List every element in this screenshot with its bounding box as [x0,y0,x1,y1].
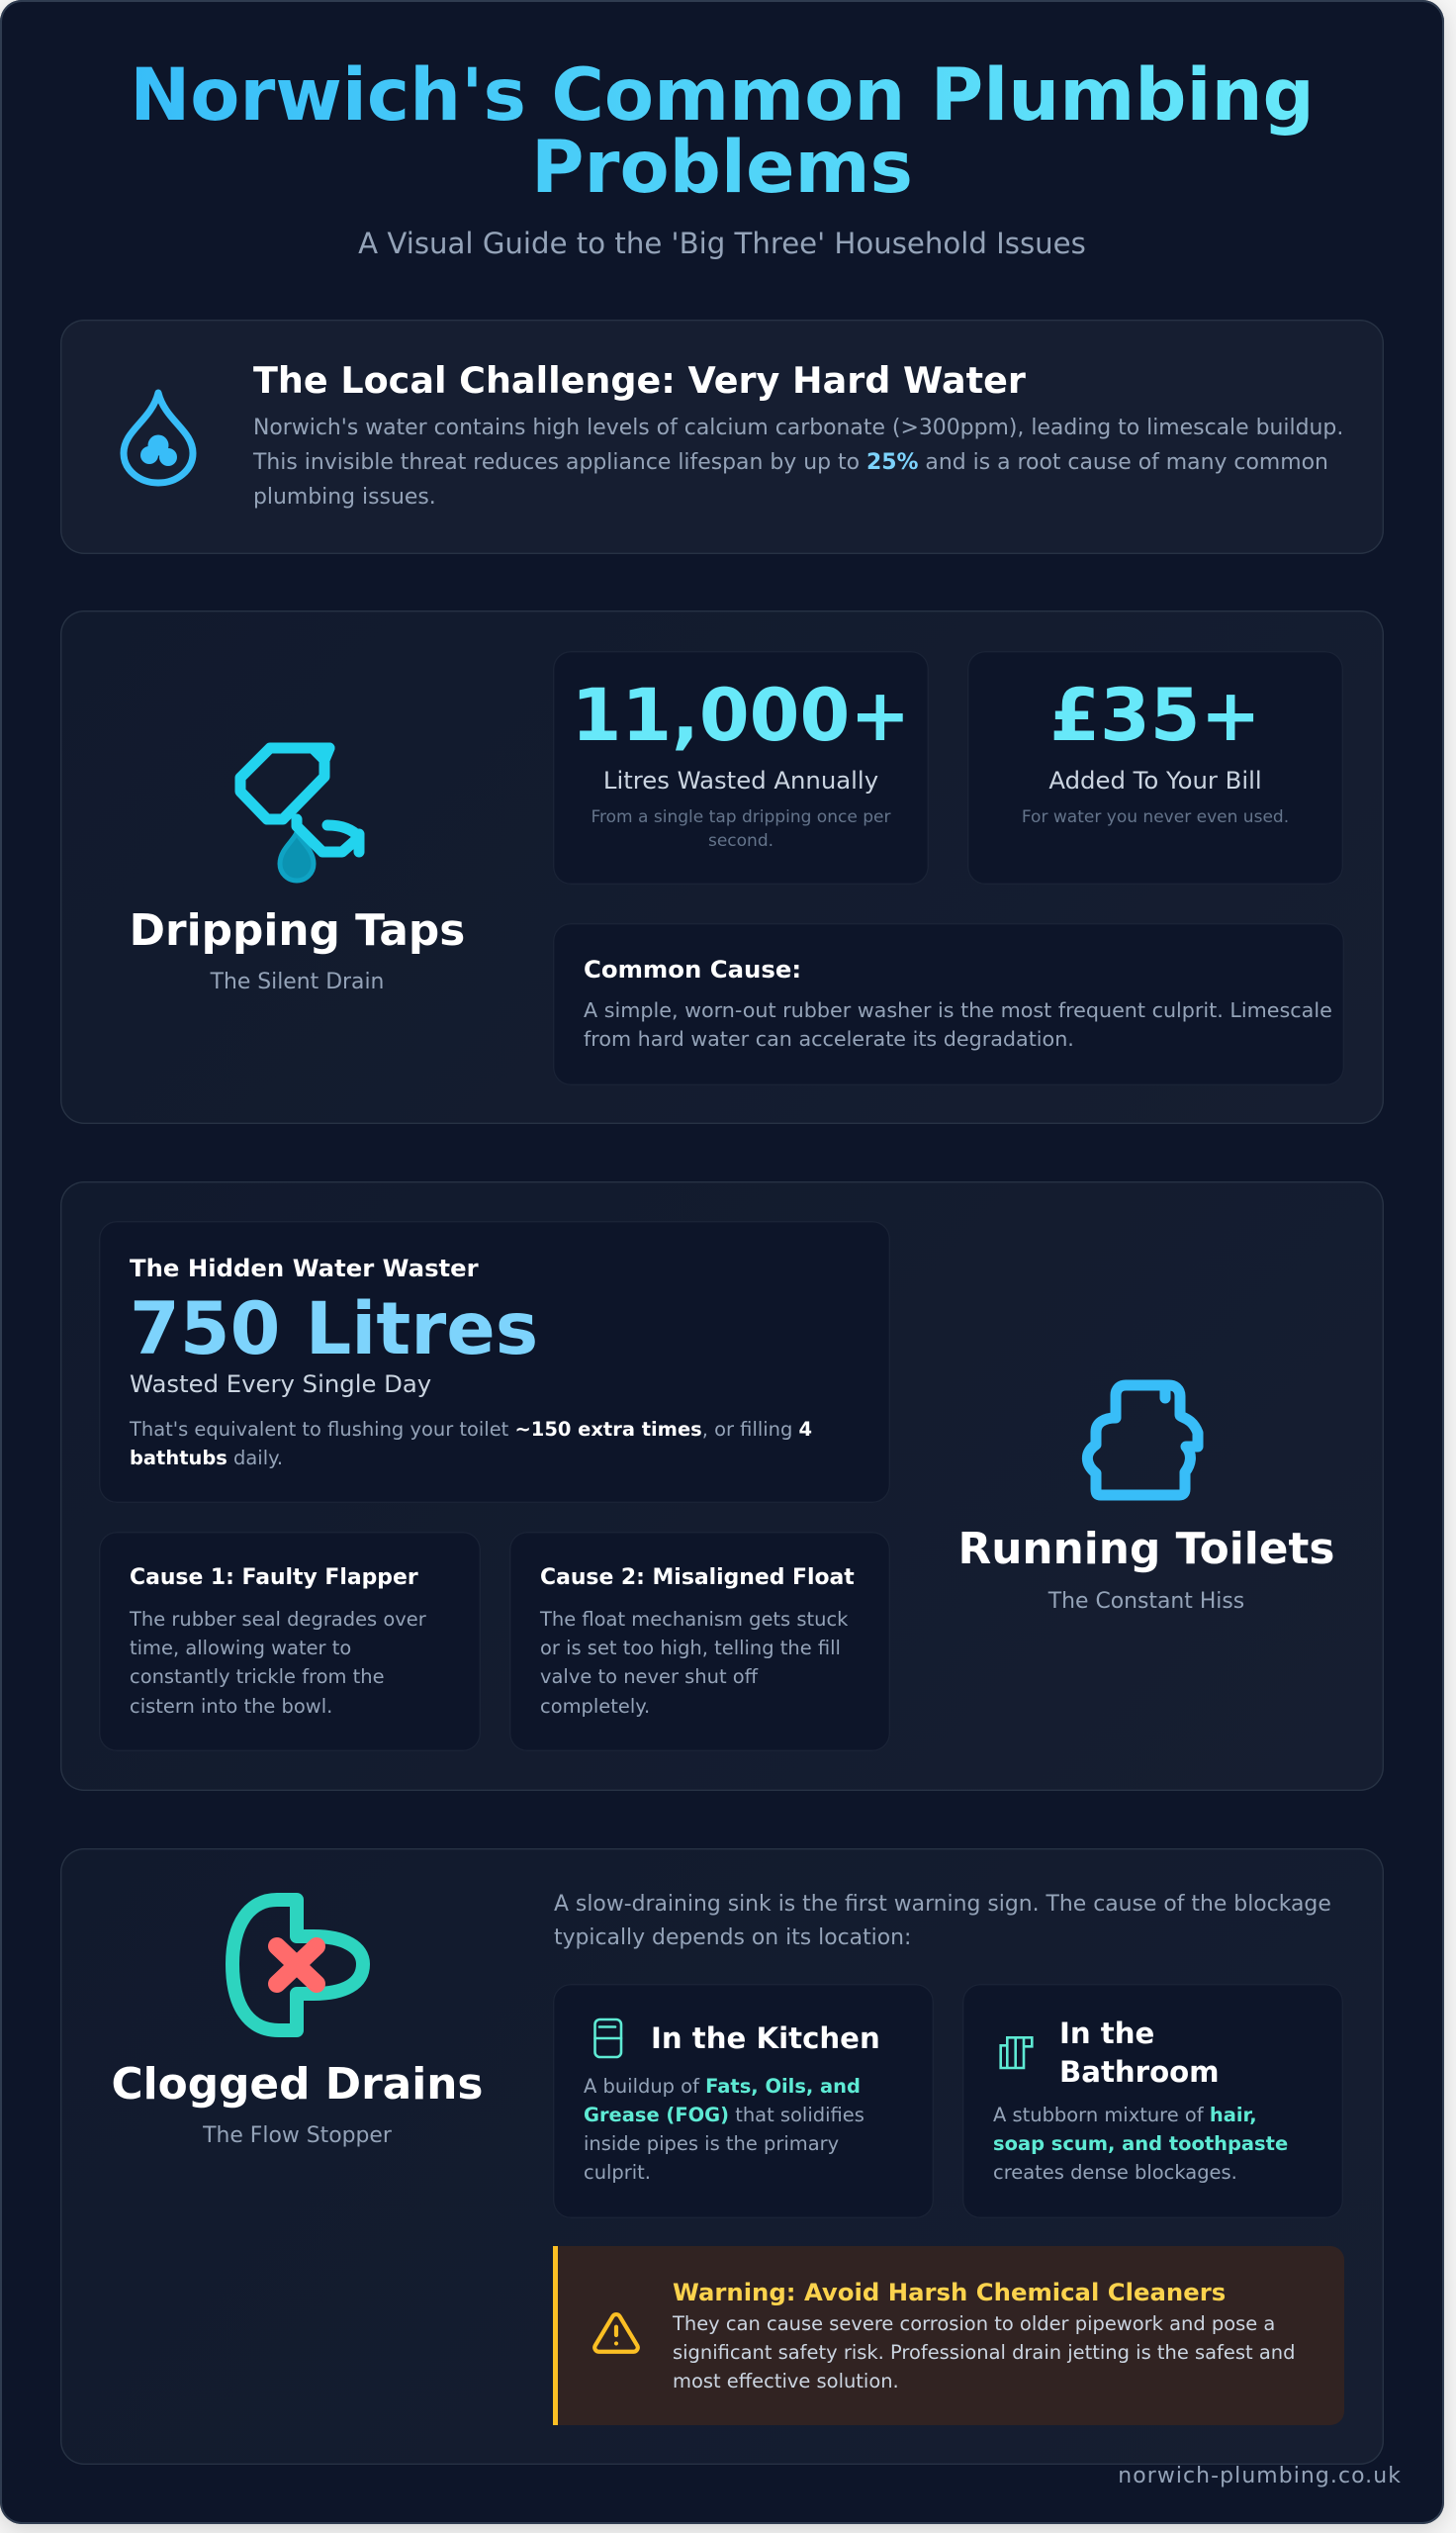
warning text: significant safety risk. Professional drain jetting is the safest and [673,2341,1295,2364]
card text: A stubborn mixture of hair, [993,2104,1257,2125]
text block [253,416,1343,510]
stat label: Litres Wasted Annually [603,766,878,795]
text block: Norwich's water contains high levels of calcium carbonate (>300ppm), leading to limescale buildup. [253,416,1343,440]
card: cause 1 [99,1532,481,1751]
card: hidden water waster [99,1221,890,1503]
subtitle: A Visual Guide to the 'Big Three' Household Issues [358,227,1086,260]
card heading: Bathroom [1059,2055,1220,2089]
card heading: The Hidden Water Waster [130,1254,479,1282]
section subtitle: The Silent Drain [211,970,384,994]
card text: or is set too high, telling the fill [540,1637,841,1659]
card heading [1059,2017,1220,2089]
card heading: Cause 2: Misaligned Float [540,1565,855,1590]
card: kitchen [553,1984,934,2218]
section title: Dripping Taps [130,905,465,956]
card text: completely. [540,1695,650,1718]
warning text [673,2311,1295,2392]
icon: water drop with minerals [121,390,196,487]
running toilets heading group [958,1379,1334,1614]
card text: time, allowing water to [130,1637,351,1659]
card text: culprit. [584,2161,651,2184]
title: Problems [531,126,913,210]
footer url: norwich-plumbing.co.uk [1118,2464,1402,2488]
card text: bathtubs daily. [130,1447,283,1469]
stat note [591,807,891,851]
card text: A buildup of Fats, Oils, and [584,2074,861,2098]
card text: That's equivalent to flushing your toilet ~150 extra times, or filling 4 [130,1418,812,1441]
warning text: They can cause severe corrosion to older pipework and pose a [673,2311,1275,2335]
icon: warning triangle [592,2312,640,2354]
icon: bathroom pipes [999,2036,1034,2070]
card heading: In the [1059,2017,1154,2050]
stat number: 11,000+ [572,674,910,758]
card text [584,2074,864,2184]
card text: soap scum, and toothpaste [993,2132,1288,2155]
warning callout [553,2246,1344,2425]
warning text: most effective solution. [673,2370,899,2392]
card text [584,998,1332,1051]
intro text: A slow-draining sink is the first warning sign. The cause of the blockage [554,1892,1331,1917]
card heading: Common Cause: [584,955,801,984]
big number: 750 Litres [130,1287,538,1371]
section subtitle: The Flow Stopper [203,2123,392,2148]
panel: the local challenge [60,320,1384,554]
panel: dripping taps [60,610,1384,1124]
card text: constantly trickle from the [130,1665,385,1688]
card text: The float mechanism gets stuck [540,1608,848,1631]
dripping taps heading group [130,742,465,994]
card text [129,1418,812,1469]
clogged drains heading group [111,1893,484,2148]
title [130,53,1315,210]
icon: dripping tap [235,742,364,883]
icon: kitchen fridge [593,2018,623,2058]
panel: clogged drains [60,1848,1384,2465]
card: cause 2 [509,1532,890,1751]
card text: from hard water can accelerate its degradation. [584,1027,1074,1051]
warning heading: Warning: Avoid Harsh Chemical Cleaners [673,2278,1226,2306]
number label: Wasted Every Single Day [130,1369,431,1398]
section title: Clogged Drains [111,2059,484,2110]
card text [540,1608,849,1718]
card: common cause [553,923,1344,1085]
stat note: From a single tap dripping once per [591,807,891,827]
stat label: Added To Your Bill [1048,766,1262,795]
icon: toilet [1082,1379,1203,1500]
stat note: For water you never even used. [1022,807,1289,827]
card text: The rubber seal degrades over [130,1608,426,1631]
stat card: litres wasted [553,651,929,885]
stat number: £35+ [1049,674,1261,758]
heading: The Local Challenge: Very Hard Water [253,359,1026,402]
card heading: Cause 1: Faulty Flapper [130,1565,418,1590]
card text [993,2104,1288,2184]
card text: A simple, worn-out rubber washer is the most frequent culprit. Limescale [584,998,1332,1022]
card text: inside pipes is the primary [584,2132,839,2155]
stat note: second. [708,831,774,851]
card text: valve to never shut off [540,1665,758,1688]
section title: Running Toilets [958,1524,1334,1574]
text block: plumbing issues. [253,485,436,510]
card heading: In the Kitchen [651,2021,880,2055]
panel: running toilets [60,1181,1384,1791]
icon: blocked drain [226,1893,370,2037]
stat card: bill [967,651,1343,885]
card: bathroom [962,1984,1343,2218]
section subtitle: The Constant Hiss [1048,1589,1244,1614]
card text [129,1608,426,1718]
intro text: typically depends on its location: [554,1925,911,1950]
intro text [554,1892,1331,1950]
card text: cistern into the bowl. [130,1695,332,1718]
card text: Grease (FOG) that solidifies [584,2104,864,2126]
title: Norwich's Common Plumbing [130,53,1315,138]
card text: creates dense blockages. [993,2161,1237,2184]
text block: This invisible threat reduces appliance lifespan by up to 25% and is a root cause of many common [253,450,1328,475]
